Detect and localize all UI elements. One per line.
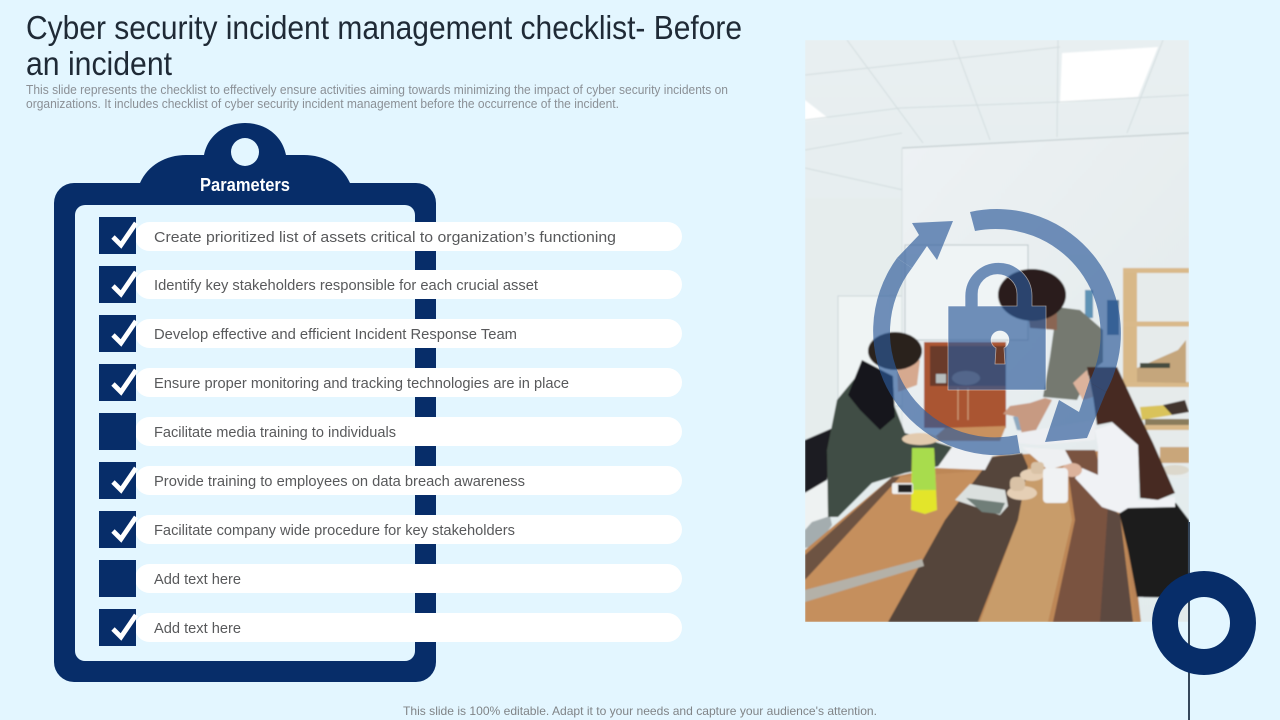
chair bbox=[805, 427, 835, 548]
decorative vertical line bbox=[1188, 522, 1190, 720]
item 9: Add text here bbox=[154, 621, 241, 637]
back wall bbox=[902, 296, 904, 334]
table bbox=[805, 426, 1141, 622]
item 6: Provide training to employees on data breach awareness bbox=[154, 474, 525, 490]
item 8 bbox=[99, 560, 682, 597]
clipboard heading: Parameters bbox=[200, 175, 290, 195]
item 4 bbox=[99, 364, 682, 401]
ceiling lights and grid bbox=[805, 40, 1189, 190]
item 7: Facilitate company wide procedure for key stakeholders bbox=[154, 523, 515, 539]
item 3: Develop effective and efficient Incident Response Team bbox=[154, 327, 517, 343]
icon: circular arrows with padlock bbox=[873, 209, 1121, 455]
item 8: Add text here bbox=[154, 572, 241, 588]
item 9 bbox=[99, 609, 682, 646]
person in grey sweater bbox=[998, 269, 1103, 434]
subtitle text block: This slide represents the checklist to effectively ensure activities aiming towards minimizing the impact of cyber security incidents on bbox=[26, 83, 728, 97]
item 7 bbox=[99, 511, 682, 548]
subtitle text block bbox=[26, 83, 728, 111]
item 1 bbox=[99, 217, 682, 254]
decorative ring bbox=[1165, 584, 1243, 662]
arc arrow: bottom through left bbox=[873, 221, 1020, 455]
photo: team meeting in office bbox=[805, 40, 1189, 622]
title bbox=[26, 9, 742, 82]
side wall bbox=[805, 198, 903, 438]
checklist bbox=[99, 217, 682, 646]
cabinet bbox=[924, 342, 1006, 428]
item 5: Facilitate media training to individuals bbox=[154, 425, 396, 441]
person in plaid jacket bbox=[827, 332, 993, 517]
subtitle text block: organizations. It includes checklist of cyber security incident management before the occurrence of the incident. bbox=[26, 97, 619, 111]
item 2 bbox=[99, 266, 682, 303]
person in white shirt bbox=[1018, 367, 1175, 513]
padlock bbox=[948, 262, 1046, 390]
item 4: Ensure proper monitoring and tracking technologies are in place bbox=[154, 376, 569, 392]
woman's dark trousers bbox=[1118, 503, 1189, 598]
whiteboard bbox=[905, 245, 1028, 340]
shelves bbox=[1123, 268, 1189, 478]
title: Cyber security incident management checklist- Before bbox=[26, 9, 742, 46]
item 3 bbox=[99, 315, 682, 352]
footer text: This slide is 100% editable. Adapt it to your needs and capture your audience's attention. bbox=[403, 704, 877, 718]
item 1: Create prioritized list of assets critical to organization’s functioning bbox=[154, 229, 616, 246]
item 6 bbox=[99, 462, 682, 499]
blue objects near the shelf bbox=[1085, 290, 1119, 335]
item 2: Identify key stakeholders responsible for each crucial asset bbox=[154, 278, 538, 294]
item 5 bbox=[99, 413, 682, 450]
arc arrow: top to lower right bbox=[970, 209, 1121, 442]
title: an incident bbox=[26, 45, 172, 82]
panel: clipboard bbox=[54, 123, 436, 682]
table items bbox=[892, 433, 1072, 515]
